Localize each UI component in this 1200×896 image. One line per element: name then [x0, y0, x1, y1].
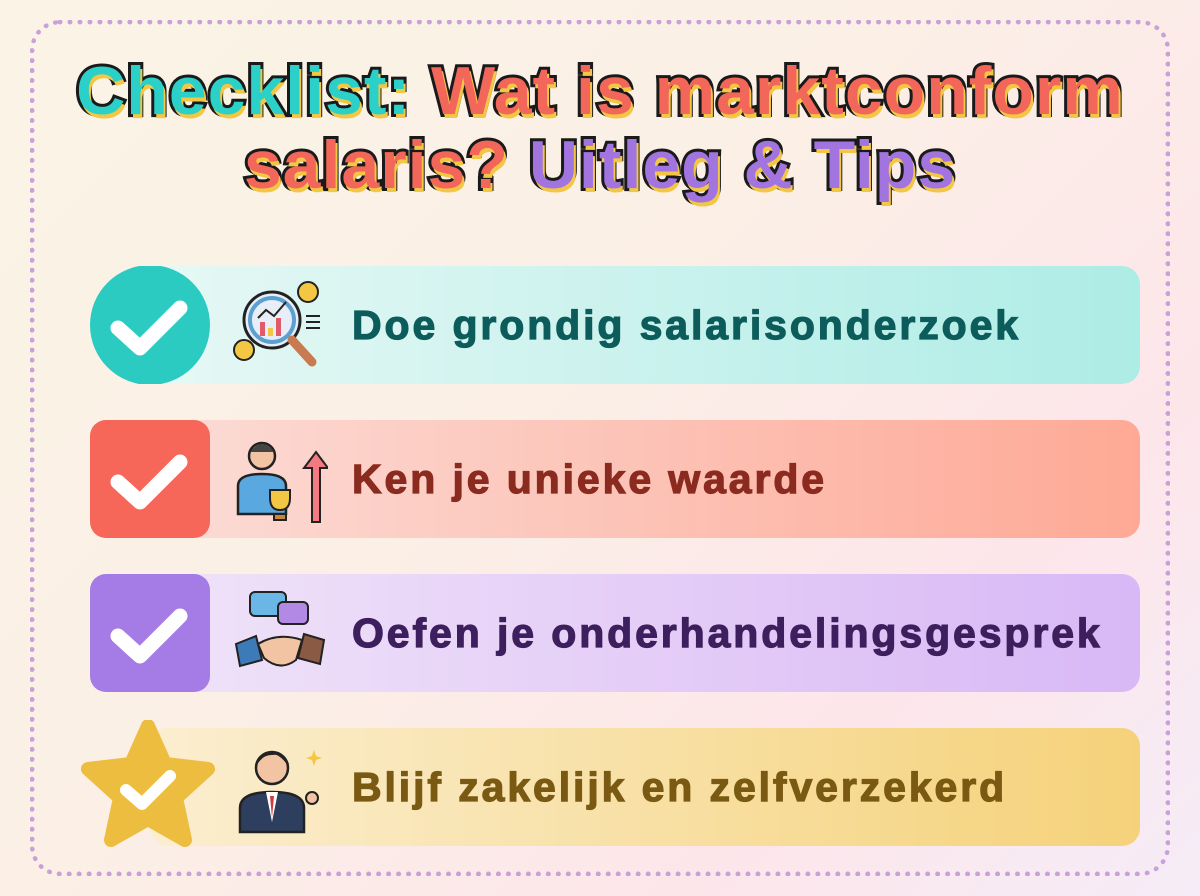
text: Blijf zakelijk en zelfverzekerd — [352, 764, 1007, 810]
row 1 — [90, 266, 1140, 384]
icon: magnifier chart — [233, 281, 320, 366]
icon: handshake chat — [234, 591, 326, 668]
text: Oefen je onderhandelingsgesprek — [352, 610, 1103, 656]
title — [76, 53, 1124, 206]
text: Ken je unieke waarde — [352, 456, 827, 502]
row 3 — [90, 574, 1140, 692]
icon: businessman — [238, 750, 322, 834]
row 2 — [90, 420, 1140, 538]
icon: check square purple — [90, 574, 210, 692]
icon: check circle — [90, 266, 210, 384]
icon: check square — [90, 420, 210, 538]
title: salaris? Uitleg & Tips — [244, 127, 956, 203]
row 4 — [81, 720, 1140, 847]
text: Doe grondig salarisonderzoek — [352, 302, 1021, 348]
title: Checklist: Wat is marktconform — [76, 53, 1124, 129]
icon: person trophy arrow — [236, 442, 328, 523]
icon: star check — [81, 720, 215, 847]
